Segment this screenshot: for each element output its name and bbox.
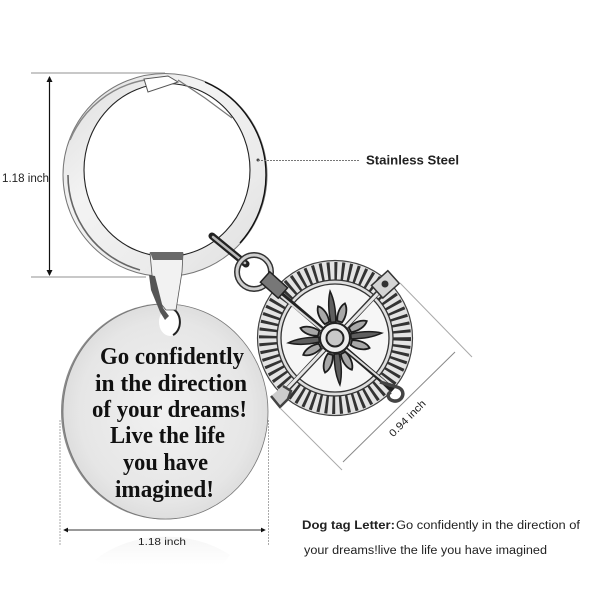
caption: dog tag letter: Go confidently in the direction of [396,520,581,532]
dimension: ring height 1.18 inch: 1.18 inch [2,173,49,185]
compass hub [320,323,350,353]
letter W [271,386,291,407]
dimension: tag width 1.18 inch: 1.18 inch [138,536,186,548]
caption: dog tag letter: your dreams!live the life you have imagined [304,545,547,557]
key ring [63,74,267,276]
caption: dog tag letter: Dog tag Letter: [302,520,395,532]
engraved quote: in the direction [95,371,247,397]
compass charm [258,260,412,416]
compass cross arms [273,287,393,390]
ribbed rim [258,260,412,416]
letter S [380,382,403,401]
tag hole [159,308,181,336]
tag bail [149,252,183,320]
dimension: compass 0.94 inch [280,283,472,470]
engraved quote [92,344,247,503]
letter E [371,271,399,298]
caption: dog tag letter [302,520,581,557]
compass link [212,236,271,289]
round dog tag [61,304,268,520]
engraved quote: Live the life [110,423,225,449]
engraved quote: Go confidently [100,344,244,370]
engraved quote: you have [123,450,208,476]
engraved quote: imagined! [115,477,214,503]
tag reflection [95,537,230,565]
label: Stainless Steel: Stainless Steel [366,154,459,168]
letter N [260,272,288,298]
engraved quote: of your dreams! [92,397,247,423]
sunburst [283,286,387,390]
dimension: compass 0.94 inch: 0.94 inch [387,398,429,440]
ring pointer dot [256,158,260,162]
